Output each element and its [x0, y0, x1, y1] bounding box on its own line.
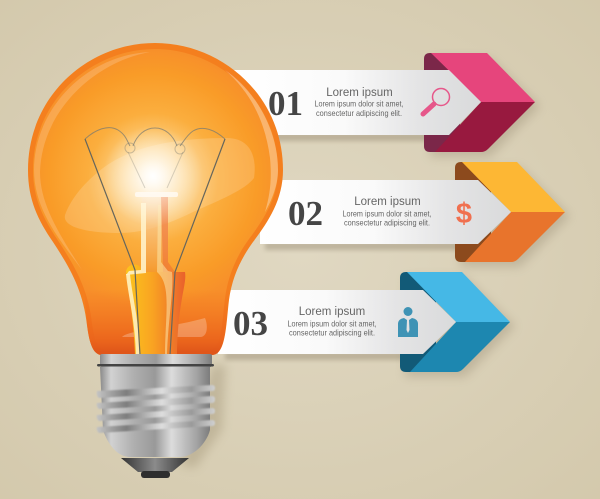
heading 3: Lorem ipsum: [299, 306, 365, 318]
body text 1: consectetur adipiscing elit.: [316, 108, 402, 118]
stem left highlight: [126, 203, 146, 275]
left rim highlight: [34, 52, 150, 270]
body text 3: consectetur adipiscing elit.: [289, 328, 375, 338]
glow: [103, 126, 203, 226]
ribbon 2: [260, 180, 511, 244]
threads: [97, 385, 215, 433]
glass stem: [126, 192, 185, 355]
number 02: 02: [288, 194, 323, 233]
body text 1: [314, 98, 404, 118]
stem right highlight: [157, 205, 172, 355]
screw base: [97, 354, 215, 478]
stem lower: [126, 264, 185, 355]
filament: [85, 128, 225, 355]
heading 2: Lorem ipsum: [354, 196, 421, 208]
arrow 2 bottom face: [465, 212, 565, 262]
stem neck: [142, 197, 168, 272]
body text 3: Lorem ipsum dolor sit amet,: [288, 318, 376, 328]
number 03: 03: [233, 304, 268, 343]
right reflection: [225, 70, 278, 212]
number 01: 01: [268, 84, 303, 123]
ribbon 1: [232, 70, 481, 135]
lower reflection: [122, 318, 207, 337]
dark ring: [97, 364, 214, 366]
stem neck red side: [161, 197, 175, 272]
bulb shadow: [180, 365, 226, 468]
contact: [141, 471, 170, 478]
body text 2: [342, 208, 432, 228]
arrow 2 fold and shadow: [265, 162, 570, 267]
arrow 3 top face: [407, 272, 510, 322]
icon: businessman: [398, 307, 418, 337]
ribbon 3: [218, 290, 456, 354]
collar: [100, 354, 212, 367]
light bulb: [28, 43, 283, 478]
stem cap: [135, 192, 178, 197]
arrow 3 bottom face: [410, 322, 510, 372]
infographic item 1: [232, 53, 540, 157]
arrow 2 top face: [462, 162, 565, 212]
arrow 1 fold and shadow: [240, 53, 540, 157]
infographic item 2: [260, 162, 570, 267]
arrow 3 fold and shadow: [225, 272, 515, 377]
body text 1: Lorem ipsum dolor sit amet,: [314, 98, 404, 108]
glass rim: [28, 43, 283, 355]
body text 3: [288, 318, 376, 338]
icon: dollar: $: [456, 198, 472, 230]
base body: [100, 367, 210, 457]
arrow 1 bottom face: [435, 102, 535, 152]
body text 2: consectetur adipiscing elit.: [344, 218, 430, 228]
icon: magnifier: [423, 88, 450, 114]
arrow 1 top face: [431, 53, 535, 102]
glass inner: [33, 49, 278, 350]
stem lower highlight: [126, 274, 140, 355]
highlight band: [65, 138, 255, 233]
infographic item 3: [218, 272, 515, 377]
bottom cap: [121, 458, 189, 472]
glass lower tint: [84, 290, 229, 355]
body text 2: Lorem ipsum dolor sit amet,: [342, 208, 432, 218]
heading 1: Lorem ipsum: [326, 87, 393, 99]
